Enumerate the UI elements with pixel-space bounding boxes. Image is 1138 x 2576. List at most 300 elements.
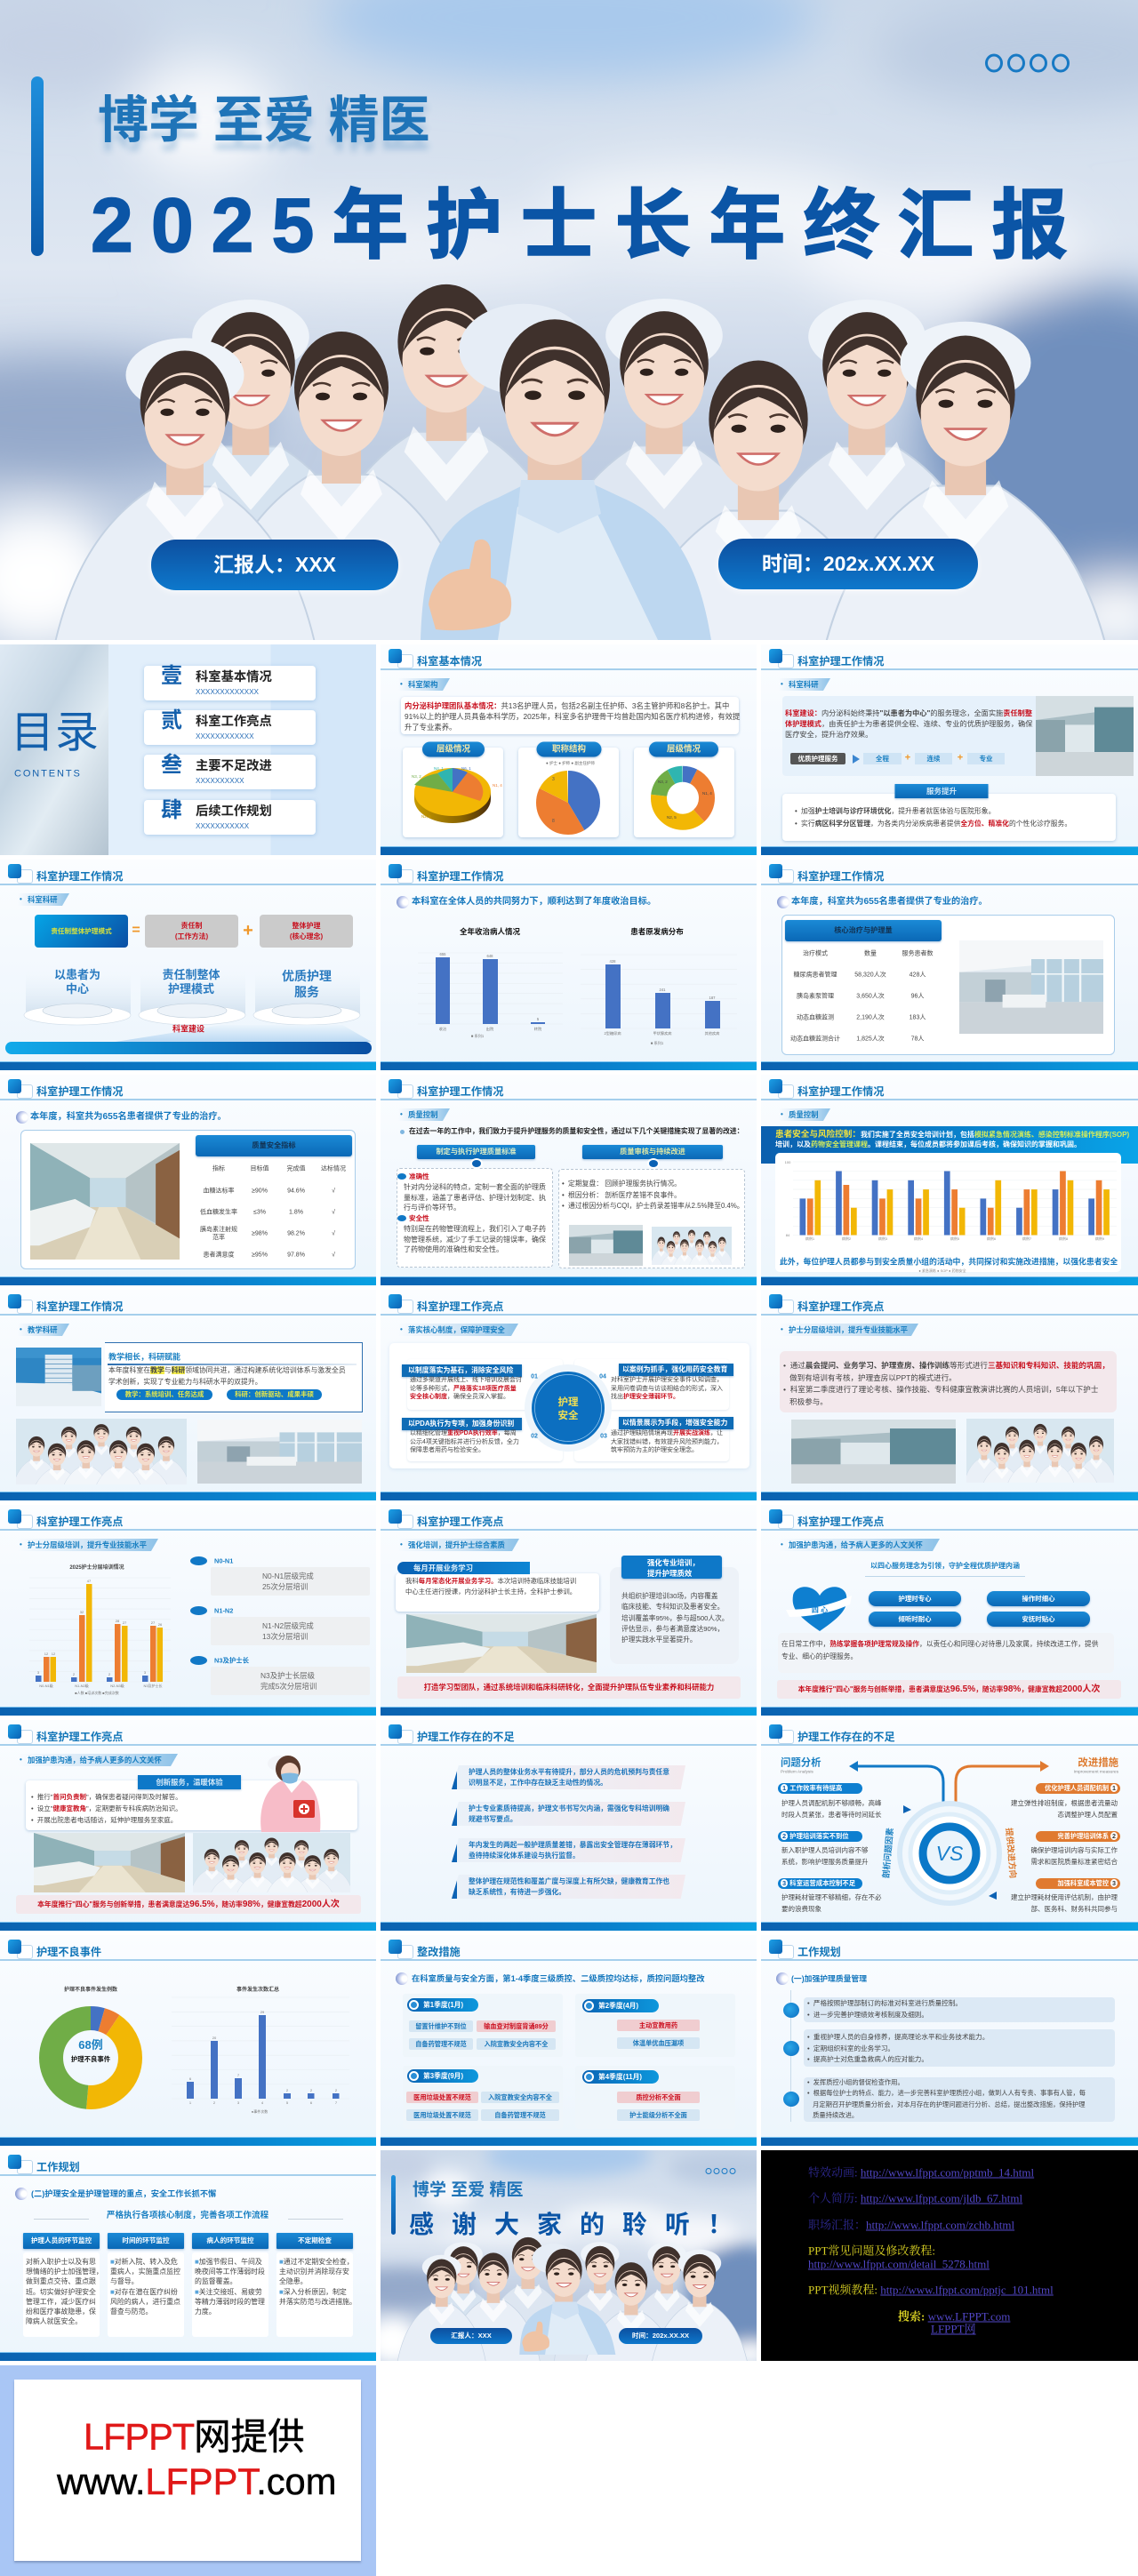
column 1: 护理人员的环节监控: [31, 2236, 92, 2244]
pill: level: [422, 741, 485, 757]
table heading: 核心治疗与护理量: [834, 926, 893, 934]
text 准确性: 针对内分泌科的特点，定制一套全面的护理质: [404, 1183, 546, 1191]
date pill: [619, 2328, 702, 2344]
card: [20, 1130, 356, 1269]
section tag: •: [20, 895, 22, 903]
column 3: ■加强节假日、午间及: [195, 2258, 262, 2266]
icon: sphere: [397, 896, 409, 908]
pillar text 1: 以患者为: [54, 968, 100, 981]
slide: core safety systems: [381, 1290, 757, 1500]
bar chart: N2-N3级: [110, 1683, 124, 1688]
bar charts: 5: [537, 1017, 540, 1021]
card: 壹: XXXXXXXXXXXXX: [196, 688, 259, 696]
numbers: 03: [600, 1433, 607, 1440]
column 3: 晚夜间等工作薄弱时段: [195, 2268, 265, 2276]
icon: sphere: [777, 896, 789, 908]
footer band: [761, 846, 1138, 855]
slide: monthly training: [381, 1505, 757, 1716]
decorative rings: [985, 53, 1070, 73]
donut and bar charts: 2: [213, 2100, 216, 2105]
header: 科室护理工作情况: [797, 1085, 884, 1098]
column 1: 班。切实做好护理安全: [26, 2288, 96, 2296]
header: 科室护理工作亮点: [36, 1516, 123, 1528]
indicators table: 目标值: [251, 1166, 268, 1172]
grouped bar chart: 病例2: [842, 1236, 852, 1241]
main title: 2025年护士长年终汇报: [91, 183, 1086, 268]
section tag: [398, 678, 450, 691]
pillar text 1: 中心: [66, 982, 89, 996]
photo: ward corridor: [34, 1833, 185, 1892]
header: [761, 1720, 1138, 1746]
indicators table: 1.8%: [289, 1209, 303, 1216]
pill 2: 操作时细心: [1022, 1595, 1054, 1603]
column 4: 全隐患。: [279, 2277, 308, 2285]
pink banner: 打造学习型团队，通过系统培训和临床科研转化，全面提升护理队伍专业素养和科研能力: [424, 1683, 714, 1692]
panel text: [783, 1360, 1110, 1409]
column 3: 力度。: [195, 2308, 216, 2316]
quarter 1: 自备药管理不规范: [415, 2040, 467, 2048]
pill 3: [869, 1612, 961, 1627]
column 4: 并落实防范与改进措施。: [279, 2298, 357, 2306]
header: 护理工作存在的不足: [797, 1731, 895, 1743]
plan box 3: • 发挥质控小组的督促检查作用。: [807, 2078, 904, 2086]
button: 创新服务，温暖体验: [156, 1778, 223, 1787]
presenter pill: [430, 2328, 512, 2344]
blue heading: 提升护理质效: [647, 1569, 692, 1578]
bar chart: 47: [87, 1579, 92, 1583]
column 4: ■深入分析原因，制定: [279, 2288, 347, 2296]
column 2: [108, 2233, 184, 2337]
plan box 3: • 根据每位护士的特点、能力，进一步完善科室护理质控小组，做到人人有专责、事事有人管，每: [807, 2089, 1086, 2097]
slide: adverse events: [0, 1935, 376, 2146]
item 03: 以情景展示为手段，增强安全能力: [622, 1419, 727, 1427]
diagram: arrows and VS rings: [761, 1720, 1138, 1931]
chart title right: 事件发生次数汇总: [236, 1988, 279, 1993]
header: 科室护理工作情况: [797, 655, 884, 668]
text 准确性: [404, 1183, 546, 1212]
bullets: [795, 807, 1071, 828]
panel text: • 通过晨会提问、业务学习、护理查房、操作训练等形式进行三基知识和专科知识、技能的巩固，: [783, 1361, 1110, 1370]
quarter 1: 输血查对制度背诵89分: [484, 2022, 549, 2030]
pill: level: 层级情况: [437, 745, 470, 754]
slide: work plan two: [0, 2150, 376, 2361]
quarter 3: 自备药管理不规范: [494, 2111, 546, 2119]
chart title: 2025护士分层培训情况: [69, 1565, 124, 1571]
arrow: [853, 755, 860, 764]
section tag: •: [400, 1110, 403, 1118]
bullets: • 实行病区科学分区管理，为各类内分泌疾病患者提供全方位、精准化的个性化诊疗服务。: [795, 820, 1071, 828]
bar chart: 27: [123, 1620, 127, 1625]
bar chart: [0, 1505, 376, 1716]
grouped bar chart: 病例7: [1022, 1236, 1032, 1241]
icon: sphere: [15, 2188, 28, 2200]
pill 4: 优化护理人员调配机制 1: [1045, 1784, 1116, 1792]
header: 工作规划: [797, 1946, 841, 1958]
box: 连续: 连续: [926, 755, 941, 763]
pedestals: [23, 990, 372, 1042]
grouped bar chart: [784, 1160, 1117, 1273]
slide: problems versus improvements: [761, 1720, 1138, 1931]
central circle: 安全: [558, 1409, 579, 1421]
pill: research: 科研：创新驱动、成果丰硕: [235, 1390, 314, 1398]
pill 5: [1036, 1831, 1120, 1842]
section tag: [779, 1539, 940, 1551]
section tag: 质量控制: [408, 1109, 437, 1118]
decorative rings: [705, 2167, 736, 2175]
column 4: 主动识别并消除现存安: [279, 2268, 349, 2276]
pill 2: [778, 1831, 862, 1842]
foundation bar: [5, 1042, 372, 1054]
label: 科室建设: [172, 1024, 204, 1033]
section tag: [398, 1324, 518, 1336]
header: [381, 1720, 757, 1746]
item 03: [572, 1414, 749, 1468]
pillar text 3: 优质护理: [282, 969, 332, 983]
description text: 科室建设：内分泌科始终秉持"以患者为中心"的服务理念，全面实施责任制整: [785, 709, 1032, 717]
icon: sphere: [16, 1111, 28, 1124]
bar chart: N1-N2级: [75, 1683, 89, 1688]
slogan: 博学 至爱 精医: [98, 92, 430, 149]
box: 连续: [915, 753, 952, 764]
connector right: [647, 1158, 660, 1169]
section tag: 落实核心制度，保障护理安全: [408, 1324, 505, 1333]
info panel: [782, 696, 1036, 776]
plan box 1: [804, 1997, 1115, 2022]
header: [381, 644, 757, 670]
underline: [108, 1364, 357, 1365]
donut and bar charts: 2: [310, 2088, 313, 2092]
bar chart: 3: [37, 1670, 40, 1675]
pill: level 2: 层级情况: [667, 745, 701, 754]
pink banner: [397, 1676, 741, 1699]
quarter 1: 入院宣教安全内容不全: [485, 2040, 548, 2048]
treatment table: 动态血糖监测合计: [790, 1036, 840, 1042]
footer band: [0, 1492, 376, 1500]
treatment table: 服务患者数: [902, 951, 934, 956]
pill 6: 加强科室成本管控 3: [1058, 1879, 1116, 1887]
slide: quality control measures: [381, 1075, 757, 1285]
model box: [35, 915, 128, 948]
team summary card: [401, 697, 739, 734]
photo: ward corridor: [30, 1143, 180, 1260]
outer card: [389, 1343, 749, 1468]
box: 专业: [967, 753, 1005, 764]
column 2: 与督导。: [110, 2277, 139, 2285]
illustration: nurse: [256, 1754, 329, 1832]
text 3: 护理耗材管理不够精细，存在不必: [781, 1893, 882, 1901]
item 1: 护理人员的整体业务水平有待提升，部分人员的危机预判与责任意: [469, 1768, 669, 1776]
intro: 在过去一年的工作中，我们致力于提升护理服务的质量和安全性，通过以下几个关键措施实现了显著的改进：: [409, 1127, 743, 1135]
text 安全性: 特别是在药物管理流程上，我们引入了电子药: [404, 1225, 546, 1233]
decorative bar: [391, 2175, 396, 2235]
item 1: [452, 1765, 685, 1789]
section tag: [18, 893, 69, 906]
donut and bar charts: 20: [212, 2036, 217, 2040]
treatment table: 58,320人次: [854, 972, 886, 978]
card: 叁: XXXXXXXXXX: [196, 777, 244, 785]
bar chart: 28: [116, 1619, 120, 1623]
section tag: [779, 678, 830, 691]
grouped bar chart: 病例3: [878, 1236, 888, 1241]
concept box: (核心理念): [290, 932, 323, 940]
team summary card: 内分泌科护理团队基本情况：共13名护理人员，包括2名副主任护师、3名主管护师和8名护士。其中: [405, 701, 729, 710]
slide: shortcomings list: [381, 1720, 757, 1931]
pillar text 2: 责任制整体: [162, 968, 220, 981]
column 3: [192, 2233, 268, 2337]
item 02: 以精细化管理重视PDA执行效率，每周: [410, 1430, 517, 1436]
panel text: [108, 1364, 346, 1388]
header: [761, 1505, 1138, 1531]
date pill: [718, 539, 978, 589]
header: 科室护理工作亮点: [417, 1300, 503, 1313]
bar chart: 3: [144, 1670, 147, 1675]
bar charts: 428: [610, 959, 616, 964]
header: [761, 1935, 1138, 1961]
column 4: [276, 2233, 353, 2337]
item 01: 安全核心制度，确保全员深入掌握。: [410, 1394, 509, 1400]
donut and bar charts: [0, 1935, 376, 2146]
grouped bar chart: 100: [785, 1160, 791, 1164]
treatment table: 糖尿病患者管理: [793, 972, 837, 978]
pie charts: N4, 1: [434, 766, 444, 771]
pill 3: [778, 1878, 862, 1889]
link: resume: 个人简历: http://www.lfppt.com/jldb_67.html: [808, 2192, 1022, 2204]
training text: 共组织护理培训30场，内容覆盖: [621, 1592, 718, 1600]
text 3: 要的浪费现象: [781, 1905, 821, 1913]
panel text: • 科室第二季度进行了理论考核、操作技能、专科健康宣教演讲比赛的人员培训，5年以下护士: [783, 1385, 1098, 1394]
band text: [775, 1129, 1129, 1148]
thank you title: 感谢大家的聆听！: [409, 2211, 750, 2238]
dot 2: [783, 2041, 799, 2056]
column 2: 风险的病人，进行重点: [110, 2298, 180, 2306]
icon: heart: [786, 1583, 854, 1633]
photo: hospital: [569, 1225, 643, 1266]
photo: hospital hall: [959, 940, 1103, 1034]
caption: Improvement measures: [1074, 1771, 1118, 1775]
quarter 3: 入院宣教安全内容不全: [488, 2093, 552, 2101]
service card: [782, 794, 1116, 841]
text 6: [1011, 1892, 1118, 1915]
header: [761, 1290, 1138, 1316]
level N1-N2: [190, 1606, 370, 1645]
item 3: 年内发生的两起一般护理质量差错，暴露出安全管理存在薄弱环节，: [469, 1841, 677, 1849]
section tag: 强化培训，提升护士综合素质: [408, 1540, 505, 1548]
blue heading: 强化专业培训，: [647, 1558, 700, 1567]
provider text: LFPPT网提供: [84, 2415, 305, 2457]
treatment table: 183人: [910, 1015, 926, 1020]
provider url: www.LFPPT.com: [57, 2460, 336, 2502]
donut and bar charts: 29: [260, 2010, 265, 2014]
bar chart: N0-N1级: [39, 1683, 53, 1688]
item 01: 通过多渠道开展线上、线下培训及晨会讨: [410, 1377, 522, 1383]
indicators table: 低血糖发生率: [200, 1209, 237, 1216]
grouped bar chart: 病例4: [914, 1236, 924, 1241]
text 安全性: 物管理系统，减少了手工记录的错误率，确保: [404, 1236, 546, 1244]
section tag: [779, 1324, 918, 1336]
card text: [405, 1576, 576, 1597]
section tag: 护士分层级培训，提升专业技能水平: [789, 1324, 908, 1333]
quarter 4: 第4季度(11月): [598, 2073, 642, 2081]
diagram: arrows and VS rings: 提供改进方向: [1004, 1828, 1018, 1879]
quarter 3: 第3季度(9月): [423, 2072, 463, 2080]
text 4: 建立弹性排班制度，根据患者流量动: [1011, 1799, 1118, 1807]
heading: contents: CONTENTS: [14, 768, 82, 779]
section tag: 教学科研: [28, 1324, 57, 1333]
bar charts: 其他疾病: [705, 1030, 719, 1036]
caption: Problem Analysis: [781, 1771, 813, 1775]
statement: 本年度，科室共为655名患者提供了专业的治疗。: [30, 1112, 227, 1122]
plus: +: [905, 752, 910, 763]
slide: work plan one: [761, 1935, 1138, 2146]
slide: corrective measures: [381, 1935, 757, 2146]
footer band: [0, 1922, 376, 1931]
heading right: 质量审核与持续改进: [620, 1148, 685, 1156]
indicators table: 指标: [212, 1166, 225, 1172]
pie charts: N2, 5: [421, 814, 431, 819]
left dashed panel: [397, 1168, 553, 1268]
item 03: 筑牢预防为主的护理安全理念。: [611, 1447, 698, 1453]
blue band: [761, 1126, 1138, 1164]
indicators table: 完成值: [286, 1166, 306, 1172]
card: 叁: [144, 755, 316, 789]
header: 科室基本情况: [417, 655, 482, 668]
closing photo: sky and team: [381, 2150, 757, 2361]
header: [0, 1290, 376, 1316]
column 4: 不定期检查: [298, 2236, 332, 2244]
section tag: [398, 1108, 450, 1121]
bar chart: 27: [151, 1620, 156, 1625]
icon: heart: 四 心: [812, 1605, 828, 1614]
item 04: 以案例为抓手，强化用药安全教育: [622, 1365, 727, 1373]
item 03: 大家找错纠错，有效提升风险预判能力，: [611, 1439, 723, 1445]
grouped bar chart: 病例1: [805, 1236, 815, 1241]
quarter 1: 第1季度(1月): [423, 2001, 463, 2009]
text 1: 护理人员调配机制不够顺畅，高峰: [781, 1799, 882, 1807]
slide: provider card: [0, 2365, 376, 2576]
photo: nurses: [966, 1419, 1114, 1483]
treatment table: 96人: [911, 994, 924, 999]
right card: [610, 1567, 739, 1664]
pie charts: 8: [552, 819, 555, 824]
plus: +: [243, 921, 253, 940]
indicators table: 97.8%: [287, 1252, 305, 1259]
item 2: 护士专业素质待提高，护理文书书写欠内涵，需强化专科培训明确: [469, 1804, 669, 1812]
plus: +: [958, 752, 963, 763]
level N1-N2: 13次分层培训: [262, 1632, 308, 1641]
numbers: 01: [531, 1374, 538, 1380]
card: 叁: 主要不足改进: [196, 759, 272, 773]
pill: teaching: [116, 1389, 212, 1400]
footer band: [381, 1276, 757, 1285]
card text: 中心主任进行授课，内分泌科护士长主持，全科护士参训。: [405, 1588, 576, 1596]
footer band: [381, 1061, 757, 1070]
quarter 3: 医用垃圾处置不规范: [413, 2111, 471, 2119]
quarter 4: 护士能级分析不全面: [629, 2111, 687, 2119]
plan box 3: 月定期召开护理质量分析会，对本月存在的护理问题进行分析、总结，提出整改措施，保持护理: [813, 2100, 1086, 2108]
footer band: [0, 1707, 376, 1716]
diagram: arrows and VS rings: VS: [936, 1842, 964, 1865]
pink banner: 本年度推行"四心"服务与创新举措，患者满意度达96.5%，随访率98%，健康宣教超2000人次: [37, 1900, 340, 1909]
indicators table: ≥90%: [252, 1188, 268, 1195]
pill 5: 完善护理培训体系 2: [1058, 1832, 1116, 1840]
pink banner: [16, 1895, 361, 1914]
footer band: [381, 1922, 757, 1931]
column 1: 障病人就医安全。: [26, 2317, 82, 2325]
audit bullets: [562, 1180, 744, 1210]
rule left: [34, 2219, 89, 2220]
heading: improvements: 改进措施: [1078, 1757, 1118, 1768]
statement: (二)护理安全是护理管理的重点，安全工作长抓不懈: [31, 2189, 216, 2198]
footer band: [761, 2137, 1138, 2146]
quarter 1: [403, 1994, 563, 2057]
section tag: •: [781, 1540, 783, 1548]
white card: [26, 1780, 357, 1830]
header: [0, 1720, 376, 1746]
dot 1: [783, 2003, 799, 2018]
bar charts: 241: [660, 988, 666, 992]
item 2: 规避书写要点。: [469, 1815, 517, 1823]
pie charts: N1, 4: [702, 791, 712, 796]
indicators table: ≥98%: [252, 1230, 268, 1237]
section tag: 加强护患沟通，给予病人更多的人文关怀: [789, 1540, 923, 1548]
text 3: [781, 1892, 882, 1915]
indicators table: √: [332, 1230, 335, 1237]
central circle: 护理: [558, 1396, 579, 1408]
section tag: 科室科研: [789, 679, 818, 688]
bar chart: N3及护士长: [143, 1683, 163, 1688]
rule right: [288, 2219, 343, 2220]
grouped bar chart: 84: [786, 1233, 790, 1237]
subheading: 以四心服务理念为引领，守护全程优质护理内涵: [870, 1562, 1020, 1570]
photo: nurses: [193, 1833, 350, 1892]
slide: tiered training chart: [0, 1505, 376, 1716]
link: animation: 特效动画: http://www.lfppt.com/pptmb_14.html: [808, 2165, 1034, 2180]
chart title left: 护理不良事件发生例数: [64, 1988, 117, 1993]
heading left: [417, 1145, 535, 1159]
header: [381, 860, 757, 885]
column 1: 管理工作，减少医疗纠: [26, 2298, 96, 2306]
item 3: [452, 1838, 685, 1862]
button: [138, 1775, 241, 1789]
column 1: 想情绪的护士加强管理，: [26, 2268, 103, 2276]
numbers: [381, 1290, 757, 1500]
band text: 培训，以及药物安全管理课程。课程结束，每位成员都将参加课后考核，确保知识的掌握和巩固。: [775, 1140, 1081, 1148]
chart title 1: 全年收治病人情况: [460, 927, 520, 936]
section tag: [18, 1539, 158, 1551]
column 4: ■通过不定期安全检查，: [279, 2258, 354, 2266]
pill: titles: 职称结构: [552, 745, 586, 754]
pie charts: N2, 5: [667, 815, 677, 820]
treatment table: 治疗模式: [803, 951, 828, 956]
treatment table: 1,825人次: [856, 1036, 885, 1042]
text 安全性: [404, 1225, 546, 1253]
bar chart: 12: [44, 1652, 49, 1656]
donut and bar charts: 1: [189, 2100, 192, 2105]
method box: [145, 915, 238, 948]
method box: (工作方法): [175, 932, 208, 940]
panel text: 积极参与。: [789, 1397, 828, 1406]
pill 3: 3 科室运营成本控制不足: [782, 1879, 855, 1887]
footer band: [0, 2137, 376, 2146]
heading: problems: 问题分析: [781, 1757, 821, 1768]
section tag: 科室科研: [28, 894, 57, 903]
bullets: [31, 1791, 182, 1826]
text 准确性: 行与评价等环节。: [404, 1204, 461, 1212]
plan box 1: • 严格按照护理部制订的标准对科室进行质量控制。: [807, 1999, 962, 2007]
table heading: 质量安全指标: [252, 1141, 296, 1149]
framed panel: [105, 1342, 363, 1412]
level N1-N2: N1-N2层级完成: [262, 1621, 314, 1630]
